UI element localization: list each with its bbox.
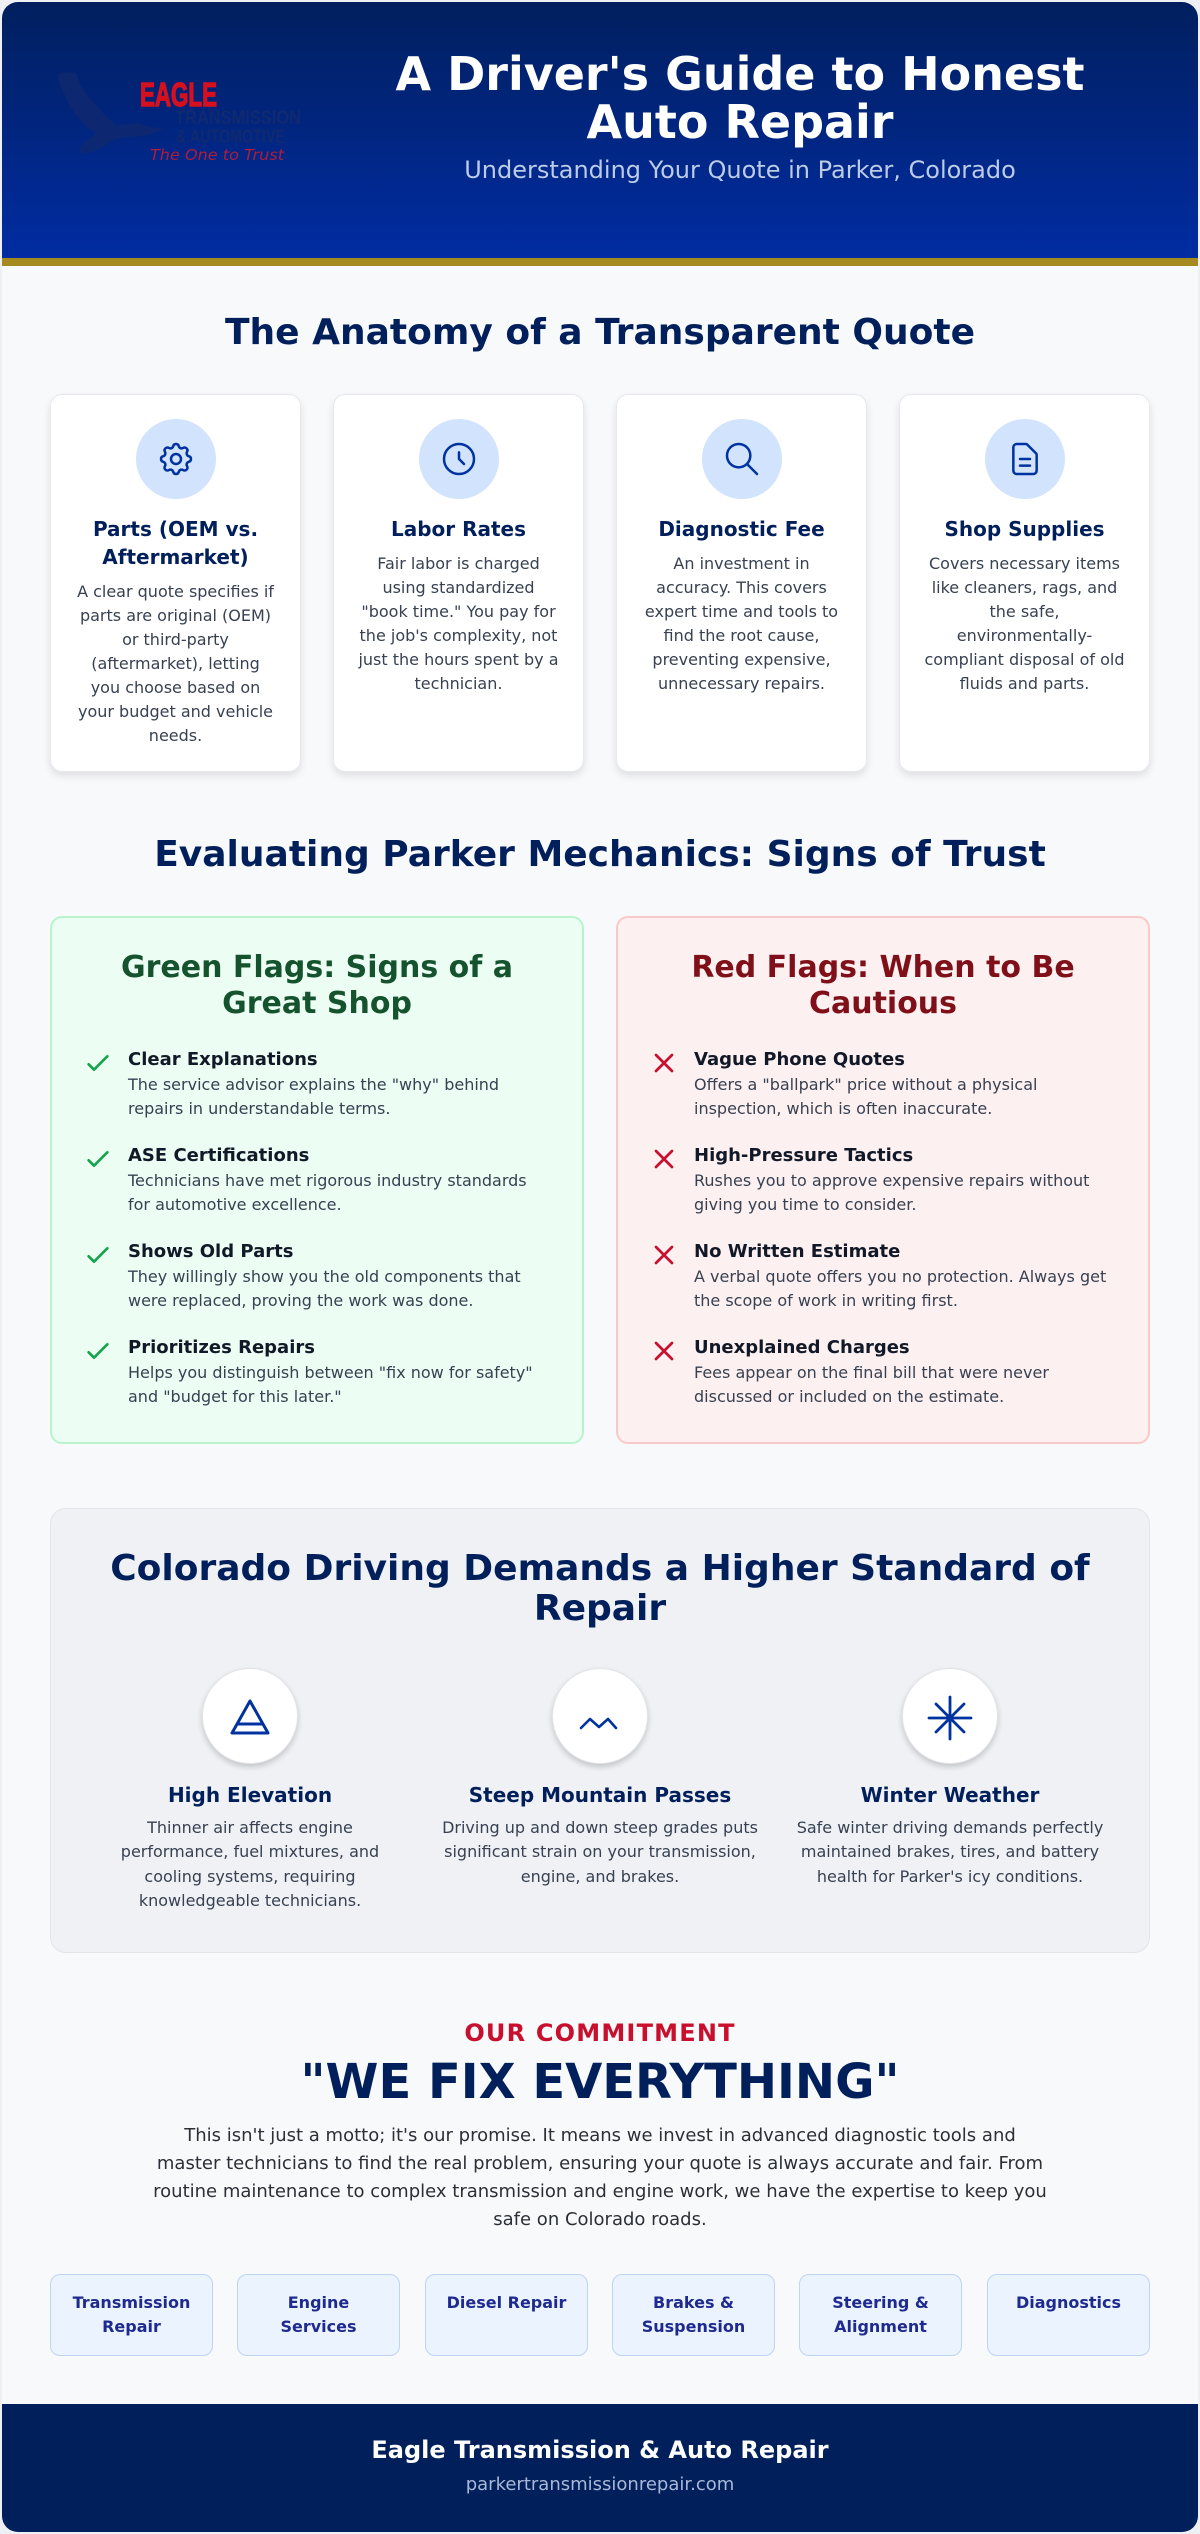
- heading: anatomy of a quote: The Anatomy of a Transparent Quote: [225, 312, 975, 353]
- item: vague phone quotes: Vague Phone Quotes: [694, 1049, 905, 1070]
- title: A Driver's Guide to Honest: [395, 47, 1085, 101]
- item: shows old parts: Shows Old Parts: [128, 1241, 293, 1262]
- card text: you choose based on: [91, 678, 260, 697]
- item: clear explanations: repairs in understandable terms.: [128, 1099, 390, 1118]
- item: high-pressure tactics: Rushes you to approve expensive repairs without: [694, 1171, 1089, 1190]
- card text: "book time." You pay for: [361, 602, 556, 621]
- commitment paragraph: This isn't just a motto; it's our promise. It means we invest in advanced diagnostic tools and: [184, 2125, 1016, 2146]
- card text: the safe,: [989, 602, 1060, 621]
- header band: [2, 2, 1198, 266]
- column text: [121, 1818, 379, 1910]
- icon: gear: [136, 419, 216, 499]
- item: prioritizes repairs: [87, 1337, 533, 1406]
- card text: fluids and parts.: [960, 674, 1089, 693]
- column text: Driving up and down steep grades puts: [442, 1818, 758, 1837]
- card text: using standardized: [382, 578, 535, 597]
- item: vague phone quotes: inspection, which is often inaccurate.: [694, 1099, 992, 1118]
- heading: we fix everything: "WE FIX EVERYTHING": [300, 2054, 900, 2110]
- logo word & AUTOMOTIVE: & AUTOMOTIVE: [176, 127, 285, 148]
- card text: Fair labor is charged: [377, 554, 540, 573]
- item: prioritizes repairs: Helps you distinguish between "fix now for safety": [128, 1363, 533, 1382]
- icon: snowflake: [902, 1668, 998, 1764]
- card text: like cleaners, rags, and: [932, 578, 1117, 597]
- item: unexplained charges: Unexplained Charges: [694, 1337, 910, 1358]
- chip: brakes and suspension: [612, 2274, 775, 2356]
- heading: Colorado driving demands: [110, 1548, 1090, 1629]
- card text: compliant disposal of old: [924, 650, 1124, 669]
- item: no written estimate: No Written Estimate: [694, 1241, 900, 1262]
- card text: (aftermarket), letting: [91, 654, 260, 673]
- item: no written estimate: [654, 1241, 1106, 1310]
- item: unexplained charges: Fees appear on the final bill that were never: [694, 1363, 1049, 1382]
- card text: your budget and vehicle: [78, 702, 273, 721]
- chip: diesel repair: Diesel Repair: [447, 2293, 566, 2312]
- card text: parts are original (OEM): [80, 606, 271, 625]
- card text: preventing expensive,: [652, 650, 831, 669]
- card title: Shop Supplies: [944, 517, 1105, 541]
- chip: engine services: [237, 2274, 400, 2356]
- item: clear explanations: [87, 1049, 499, 1118]
- card title: Diagnostic Fee: [658, 517, 825, 541]
- card title: [93, 517, 258, 569]
- chip: steering and alignment: Steering &: [832, 2293, 929, 2312]
- item: shows old parts: [87, 1241, 521, 1310]
- panel: red flags: [616, 916, 1150, 1444]
- commitment paragraph: master technicians to find the real problem, ensuring your quote is always accurate and fair. From: [157, 2153, 1043, 2174]
- chip: steering and alignment: Alignment: [834, 2317, 927, 2336]
- column text: cooling systems, requiring: [144, 1867, 356, 1886]
- item: vague phone quotes: [654, 1049, 1037, 1118]
- panel: supplies card: [899, 394, 1150, 772]
- column text: knowledgeable technicians.: [139, 1891, 361, 1910]
- card text: An investment in: [673, 554, 810, 573]
- column text: engine, and brakes.: [521, 1867, 679, 1886]
- green flags heading: [121, 950, 513, 1021]
- card title: Parts (OEM vs.: [93, 517, 258, 541]
- icon: magnifier: [702, 419, 782, 499]
- eyebrow: our commitment: OUR COMMITMENT: [464, 2019, 736, 2047]
- column text: significant strain on your transmission,: [444, 1842, 756, 1861]
- column text: maintained brakes, tires, and battery: [801, 1842, 1099, 1861]
- item: unexplained charges: [654, 1337, 1049, 1406]
- column text: [797, 1818, 1103, 1886]
- item: no written estimate: the scope of work in writing first.: [694, 1291, 958, 1310]
- logo wordmark EAGLE: EAGLE: [140, 76, 217, 113]
- chip: transmission repair: Repair: [102, 2317, 161, 2336]
- panel: green flags: [50, 916, 584, 1444]
- panel: parts card: [50, 394, 301, 772]
- chip: transmission repair: Transmission: [73, 2293, 190, 2312]
- card text: find the root cause,: [664, 626, 819, 645]
- green flags heading: Great Shop: [222, 986, 412, 1021]
- column: mountain passes: [442, 1668, 758, 1886]
- card text: just the hours spent by a: [358, 650, 559, 669]
- title: [395, 47, 1085, 149]
- column text: [442, 1818, 758, 1886]
- red flags heading: Red Flags: When to Be: [691, 950, 1075, 985]
- item: no written estimate: A verbal quote offers you no protection. Always get: [694, 1267, 1106, 1286]
- column text: performance, fuel mixtures, and: [121, 1842, 379, 1861]
- item: ASE certifications: [87, 1145, 527, 1214]
- card title: Aftermarket): [102, 545, 249, 569]
- item: high-pressure tactics: [654, 1145, 1089, 1214]
- card text: expert time and tools to: [645, 602, 838, 621]
- card text: [358, 554, 559, 693]
- chip: engine services: Engine: [288, 2293, 349, 2312]
- item: clear explanations: The service advisor explains the "why" behind: [128, 1075, 499, 1094]
- title: Auto Repair: [586, 95, 894, 149]
- commitment paragraph: safe on Colorado roads.: [493, 2209, 707, 2230]
- logo: Eagle Transmission: [58, 72, 301, 164]
- column title: High Elevation: [168, 1783, 332, 1807]
- red flags heading: [691, 950, 1075, 1021]
- item: vague phone quotes: Offers a "ballpark" price without a physical: [694, 1075, 1037, 1094]
- card text: [924, 554, 1124, 693]
- column text: Thinner air affects engine: [147, 1818, 353, 1837]
- chip: steering and alignment: [799, 2274, 962, 2356]
- commitment paragraph: routine maintenance to complex transmission and engine work, we have the expertise to keep you: [153, 2181, 1047, 2202]
- icon: clock: [419, 419, 499, 499]
- item: high-pressure tactics: High-Pressure Tactics: [694, 1145, 913, 1166]
- footer website: parkertransmissionrepair.com: [466, 2474, 734, 2495]
- card text: Covers necessary items: [929, 554, 1120, 573]
- icon: document: [985, 419, 1065, 499]
- commitment paragraph: [153, 2125, 1047, 2230]
- column text: health for Parker's icy conditions.: [817, 1867, 1083, 1886]
- footer band: [2, 2404, 1198, 2532]
- heading: signs of trust: Evaluating Parker Mechanics: Signs of Trust: [154, 834, 1046, 875]
- chip: engine services: Services: [280, 2317, 357, 2336]
- card text: needs.: [149, 726, 202, 745]
- card text: or third-party: [122, 630, 229, 649]
- chip: diagnostics: [987, 2274, 1150, 2356]
- card text: technician.: [415, 674, 502, 693]
- column: high elevation: [121, 1668, 379, 1910]
- card text: environmentally-: [957, 626, 1092, 645]
- chip: transmission repair: [50, 2274, 213, 2356]
- logo word TRANSMISSION: TRANSMISSION: [175, 108, 301, 129]
- item: clear explanations: Clear Explanations: [128, 1049, 318, 1070]
- icon: triangle peak: [202, 1668, 298, 1764]
- subtitle: Understanding Your Quote in Parker, Colorado: [464, 156, 1016, 184]
- panel: labor card: [333, 394, 584, 772]
- item: prioritizes repairs: and "budget for this later.": [128, 1387, 342, 1406]
- card title: Labor Rates: [391, 517, 526, 541]
- column title: Winter Weather: [861, 1783, 1039, 1807]
- item: shows old parts: They willingly show you the old components that: [128, 1267, 521, 1286]
- column: winter weather: [797, 1668, 1103, 1886]
- column title: Steep Mountain Passes: [469, 1783, 731, 1807]
- heading: Colorado driving demands: Colorado Driving Demands a Higher Standard of: [110, 1548, 1090, 1589]
- logo tagline: The One to Trust: [150, 146, 285, 164]
- item: ASE certifications: for automotive excellence.: [128, 1195, 342, 1214]
- card text: A clear quote specifies if: [77, 582, 274, 601]
- item: prioritizes repairs: Prioritizes Repairs: [128, 1337, 315, 1358]
- item: unexplained charges: discussed or included on the estimate.: [694, 1387, 1004, 1406]
- chip: diesel repair: [425, 2274, 588, 2356]
- item: high-pressure tactics: giving you time to consider.: [694, 1195, 916, 1214]
- icon: eagle silhouette: [58, 72, 165, 153]
- card text: [77, 582, 274, 745]
- card text: unnecessary repairs.: [658, 674, 825, 693]
- red flags heading: Cautious: [809, 986, 957, 1021]
- panel: diagnostic card: [616, 394, 867, 772]
- card text: [645, 554, 838, 693]
- green flags heading: Green Flags: Signs of a: [121, 950, 513, 985]
- panel: Colorado driving: [50, 1508, 1150, 1953]
- heading: Colorado driving demands: Repair: [534, 1588, 666, 1629]
- chip: brakes and suspension: Brakes &: [653, 2293, 734, 2312]
- item: ASE certifications: ASE Certifications: [128, 1145, 309, 1166]
- card text: the job's complexity, not: [360, 626, 557, 645]
- item: ASE certifications: Technicians have met rigorous industry standards: [128, 1171, 527, 1190]
- item: shows old parts: were replaced, proving the work was done.: [128, 1291, 473, 1310]
- icon: zigzag mountains: [552, 1668, 648, 1764]
- column text: Safe winter driving demands perfectly: [797, 1818, 1103, 1837]
- chip: brakes and suspension: Suspension: [642, 2317, 745, 2336]
- footer company name: Eagle Transmission & Auto Repair: [371, 2436, 829, 2464]
- chip: diagnostics: Diagnostics: [1016, 2293, 1121, 2312]
- card text: accuracy. This covers: [656, 578, 827, 597]
